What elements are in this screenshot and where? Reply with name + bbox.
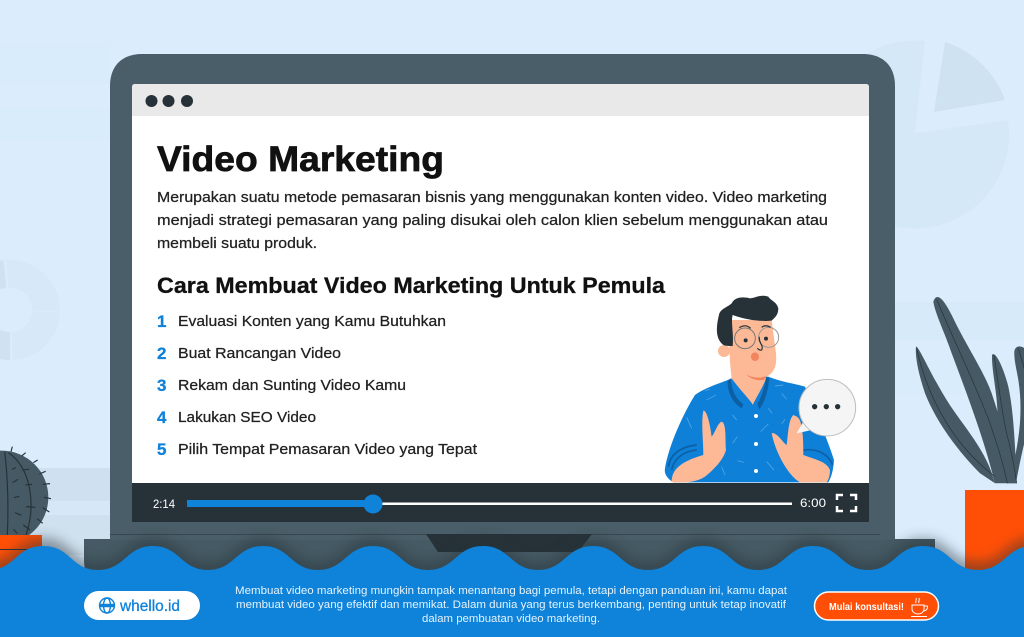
plant pot — [965, 490, 1024, 580]
logo pill — [84, 591, 200, 620]
hinge notch — [426, 534, 592, 552]
numbered list: Buat Rancangan Video — [178, 345, 341, 362]
intro paragraph — [157, 189, 828, 252]
current time: 2:14 — [153, 497, 175, 511]
numbered list: Evaluasi Konten yang Kamu Butuhkan — [178, 313, 446, 330]
numbered list: 1 — [157, 312, 166, 331]
globe icon — [99, 598, 115, 613]
footer text: dalam pembuatan video marketing. — [422, 613, 600, 625]
numbered list: 4 — [157, 408, 167, 427]
numbered list: 5 — [157, 440, 166, 459]
progress fill — [187, 500, 373, 507]
laptop — [84, 54, 935, 590]
character illustration — [665, 296, 834, 482]
logo text: whello.id — [119, 598, 180, 615]
speech bubble — [797, 379, 856, 436]
intro paragraph: menjadi strategi pemasaran yang paling disukai oleh calon klien sebelum menggunakan atau — [157, 212, 828, 229]
progress track — [373, 502, 792, 505]
screen — [132, 84, 869, 522]
numbered list: Lakukan SEO Video — [178, 409, 316, 426]
numbered list: Pilih Tempat Pemasaran Video yang Tepat — [178, 441, 478, 458]
wave shadow — [0, 538, 1024, 580]
numbered list: 2 — [157, 344, 166, 363]
numbered list: 3 — [157, 376, 166, 395]
video player bar — [132, 483, 869, 522]
numbered list: Rekam dan Sunting Video Kamu — [178, 377, 406, 394]
footer wave — [0, 546, 1024, 637]
intro paragraph: membeli suatu produk. — [157, 235, 317, 252]
title: Video Marketing — [157, 140, 444, 179]
coffee icon — [911, 598, 928, 616]
subheading: Cara Membuat Video Marketing Untuk Pemula — [157, 273, 666, 298]
progress knob — [364, 494, 382, 514]
cactus — [0, 447, 51, 544]
footer text: Membuat video marketing mungkin tampak menantang bagi pemula, tetapi dengan panduan ini, kamu dapat — [235, 585, 787, 597]
fullscreen icon — [837, 495, 856, 511]
browser bar — [132, 84, 869, 116]
plant — [916, 297, 1024, 483]
footer text: membuat video yang efektif dan memikat. Dalam dunia yang terus berkembang, penting untuk tetap inovatif — [236, 599, 787, 611]
footer text — [235, 585, 787, 625]
numbered list — [157, 312, 478, 459]
laptop base — [84, 539, 935, 590]
consultation button: Mulai konsultasi! — [829, 601, 904, 613]
laptop lid — [110, 54, 895, 540]
intro paragraph: Merupakan suatu metode pemasaran bisnis yang menggunakan konten video. Video marketing — [157, 189, 827, 206]
cactus pot — [0, 535, 42, 575]
background pie chart — [821, 40, 1009, 228]
total time: 6:00 — [800, 496, 826, 510]
background donut chart — [0, 274, 46, 346]
consultation button — [814, 592, 938, 620]
